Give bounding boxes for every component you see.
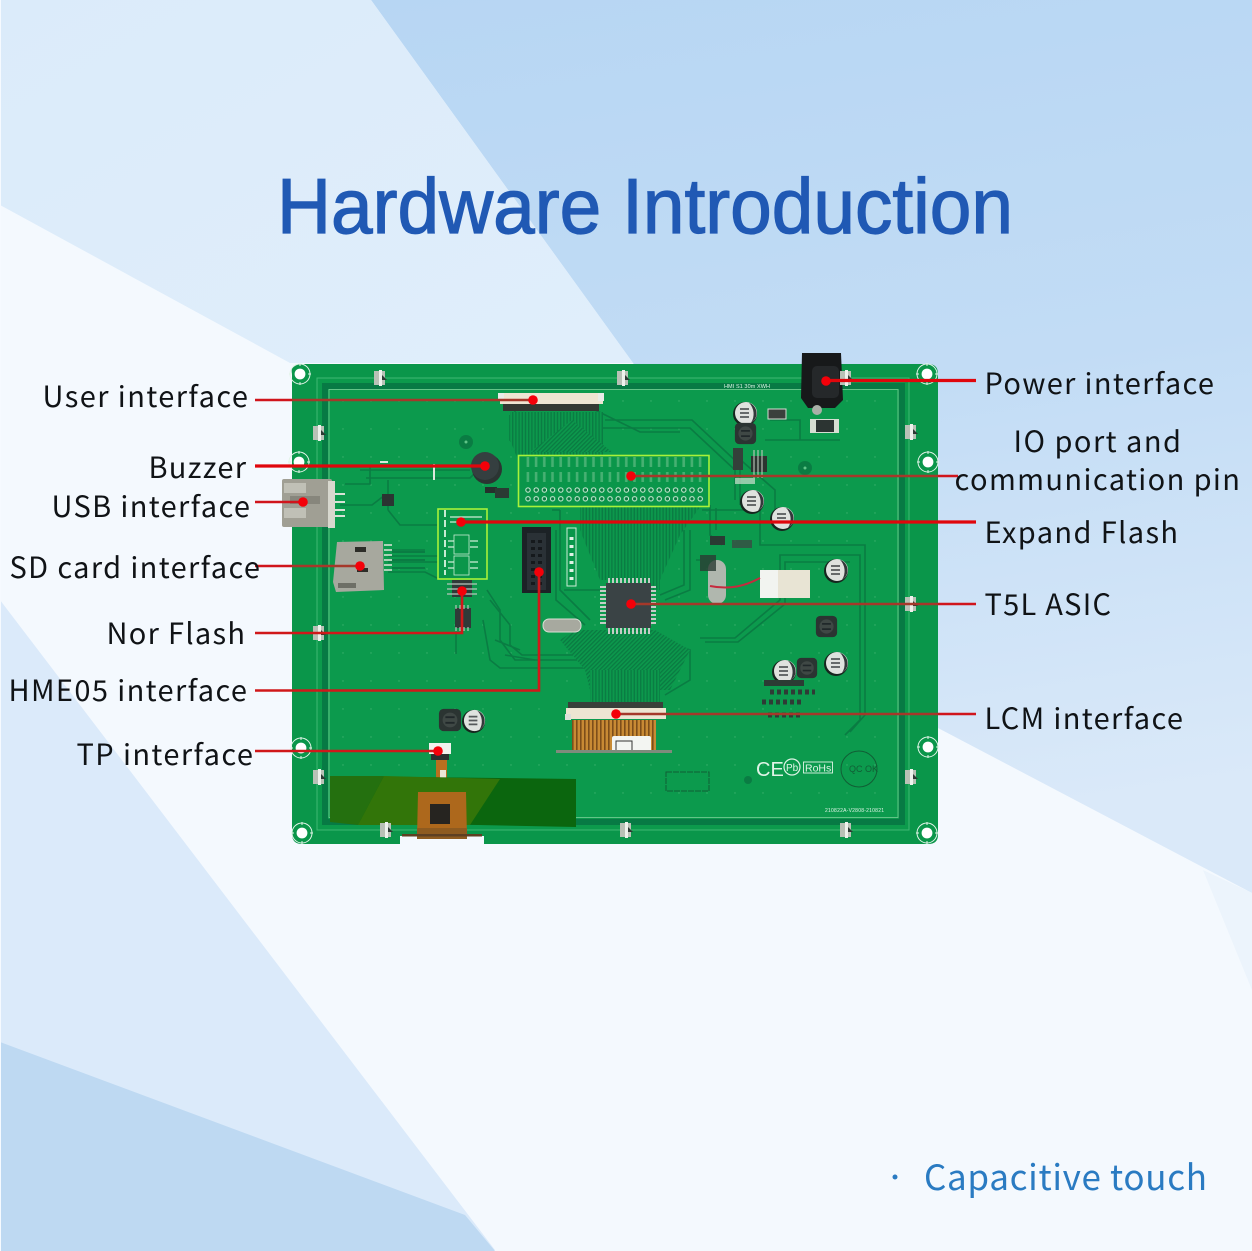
t5l asic chip [603, 581, 653, 631]
label: power interface: Power interface [984, 361, 1214, 403]
sd card connector [333, 541, 425, 592]
callout: tp interface [255, 746, 443, 756]
label: io port and communication pin: IO port and [1014, 419, 1181, 461]
power jack [768, 353, 843, 433]
feature note: capacitive touch: Capacitive touch [924, 1150, 1207, 1201]
title: Hardware Introduction [277, 162, 1013, 250]
label: t5l asic: T5L ASIC [984, 582, 1111, 624]
label: buzzer: Buzzer [148, 445, 247, 487]
callout: sd card interface [255, 561, 365, 571]
callout: hme05 interface [255, 567, 544, 690]
metal tabs [313, 370, 918, 838]
usb connector [282, 479, 345, 528]
user interface connector [498, 393, 604, 411]
tp interface and components [429, 709, 485, 788]
callout: buzzer [255, 461, 490, 471]
callout: user interface [255, 395, 538, 405]
callout lines and dots [255, 376, 976, 756]
lcm interface connector and ribbon [556, 702, 672, 753]
flash footprint area [438, 509, 487, 579]
board base [292, 364, 938, 844]
label: expand flash: Expand Flash [984, 510, 1178, 552]
regulatory marks: CE [756, 759, 784, 781]
label: nor flash: Nor Flash [106, 611, 245, 653]
io pin header area [518, 456, 709, 506]
pcb traces [340, 410, 865, 735]
hme05 header [522, 527, 576, 593]
label: sd card interface: SD card interface [10, 545, 260, 587]
callout: io port [626, 471, 958, 481]
panel: circuit board [282, 353, 939, 844]
power section components [380, 402, 848, 715]
callout: usb interface [255, 497, 308, 507]
regulatory marks: HMI S1 30m XWH [724, 384, 770, 390]
protective tape [330, 776, 576, 827]
label: usb interface: USB interface [52, 484, 250, 526]
regulatory marks: 210822A-V2808-210821 [825, 808, 884, 814]
crystal [543, 619, 581, 632]
callout: nor flash [255, 586, 467, 633]
labels [8, 361, 1240, 774]
label: lcm interface: LCM interface [984, 696, 1183, 738]
callout: t5l asic [626, 599, 976, 609]
label: io port and communication pin: communication pin [954, 457, 1240, 499]
buzzer [459, 435, 509, 498]
label: io port and communication pin [954, 419, 1240, 499]
touch fpc [402, 792, 482, 839]
callout: power interface [821, 376, 976, 386]
callout: lcm interface [611, 709, 976, 719]
regulatory marks: QC OK [849, 764, 878, 774]
nor flash chips [447, 580, 477, 631]
label: hme05 interface: HME05 interface [8, 668, 247, 710]
regulatory marks: Pb [786, 763, 799, 774]
callout: expand flash [456, 517, 976, 527]
regulatory marks: RoHs [805, 762, 831, 774]
regulatory marks [666, 384, 884, 814]
label: user interface: User interface [42, 374, 248, 416]
mounting holes [288, 363, 939, 844]
label: tp interface: TP interface [76, 732, 253, 774]
